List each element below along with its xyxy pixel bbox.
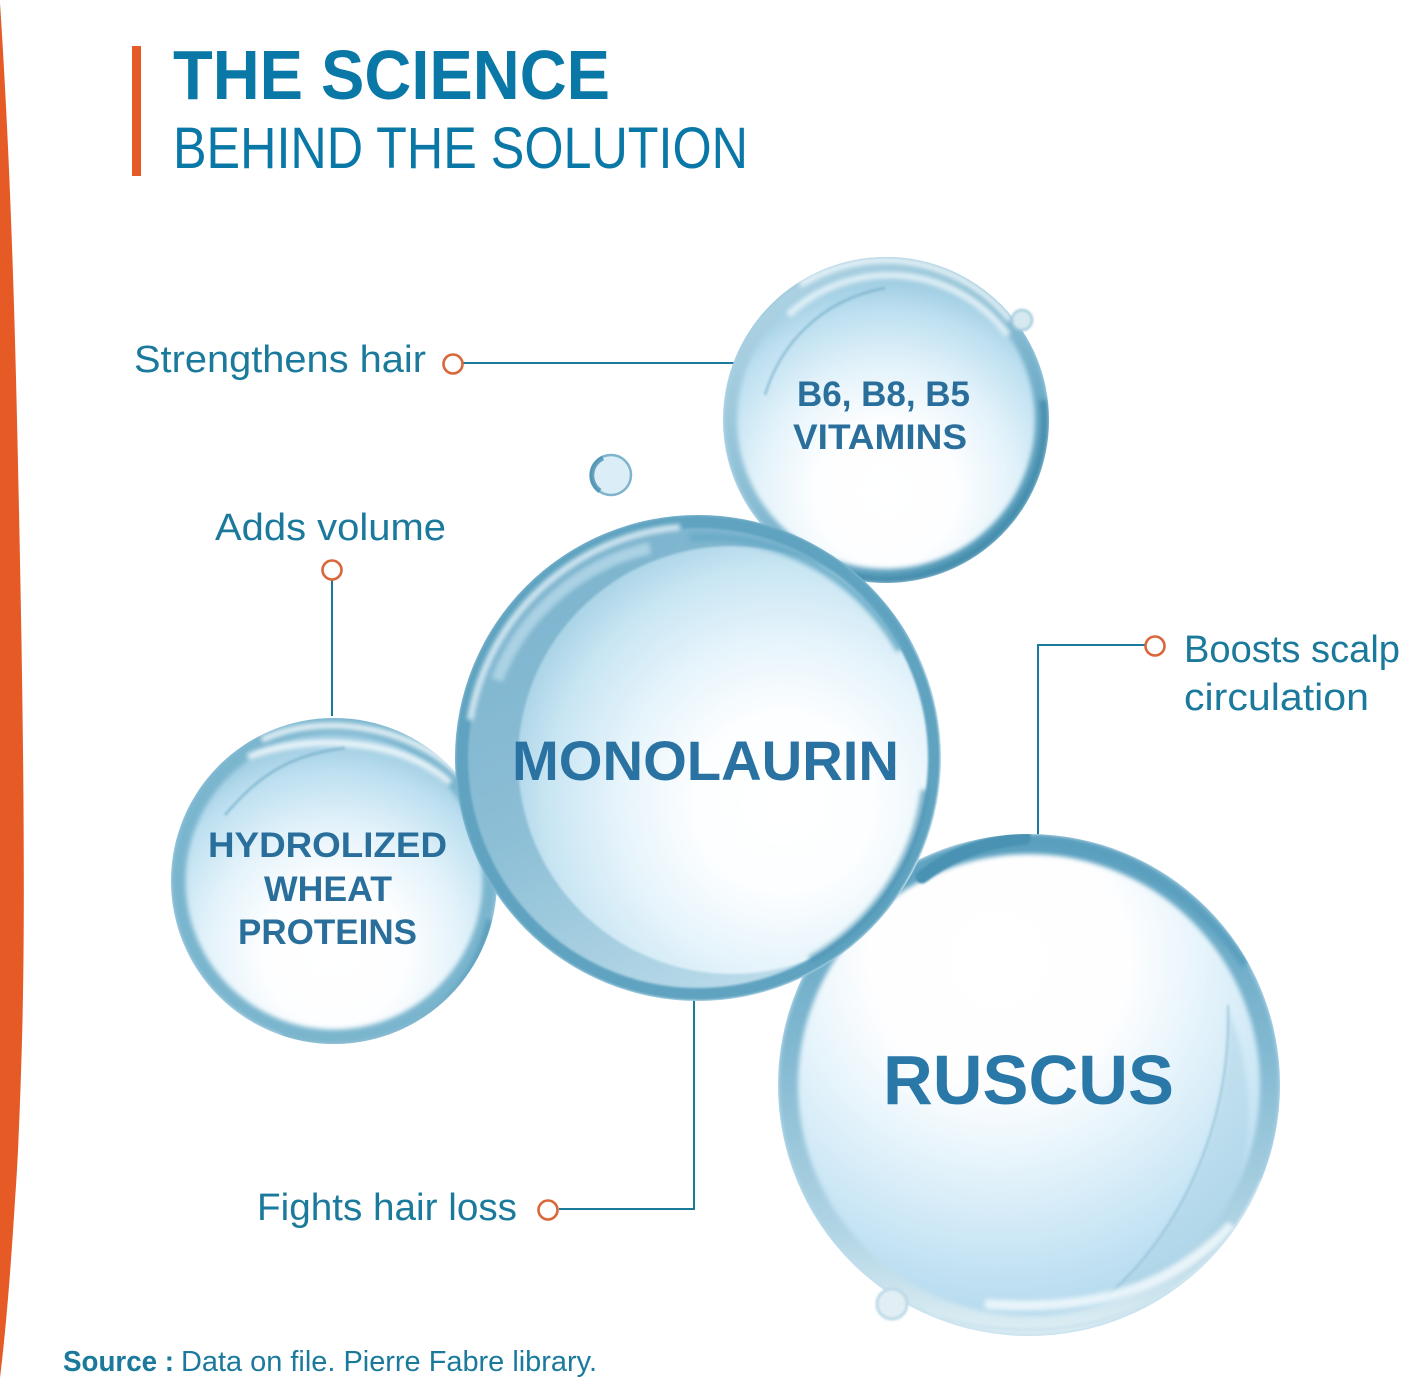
- bubble: wheat proteins: [171, 718, 497, 1048]
- label: vitamins: [793, 375, 970, 457]
- label: vitamins: VITAMINS: [793, 418, 967, 457]
- label: wheat proteins: PROTEINS: [238, 913, 417, 952]
- label: boosts scalp circulation: circulation: [1184, 677, 1369, 719]
- label: monolaurin: MONOLAURIN: [512, 729, 899, 792]
- label: wheat proteins: WHEAT: [264, 870, 392, 909]
- title: THE SCIENCE: [173, 36, 610, 114]
- connector: fights hair loss: [538, 1000, 694, 1220]
- label: boosts scalp circulation: Boosts scalp: [1184, 629, 1400, 671]
- connector: adds volume: [322, 560, 342, 716]
- label: fights hair loss: Fights hair loss: [257, 1187, 517, 1229]
- label: vitamins: B6, B8, B5: [797, 375, 970, 414]
- source note: Source :: [63, 1346, 174, 1378]
- bubble: vitamins: [723, 257, 1049, 583]
- label: boosts scalp circulation: [1184, 629, 1400, 719]
- title block: [132, 36, 748, 181]
- bubble: monolaurin: [455, 515, 946, 1001]
- source text: Data on file. Pierre Fabre library.: [181, 1346, 597, 1378]
- connector: boosts scalp circulation: [1038, 636, 1164, 836]
- label: adds volume: Adds volume: [215, 507, 446, 549]
- label: ruscus: RUSCUS: [883, 1041, 1174, 1119]
- subtitle: BEHIND THE SOLUTION: [173, 116, 748, 181]
- bubble: ruscus: [778, 834, 1280, 1336]
- label: wheat proteins: [208, 826, 447, 952]
- title accent bar: [132, 46, 141, 176]
- small droplet: [591, 455, 631, 495]
- label: strengthens hair: Strengthens hair: [134, 339, 426, 381]
- label: wheat proteins: HYDROLIZED: [208, 826, 447, 865]
- connector: strengthens hair: [444, 354, 736, 374]
- orange curved edge: [0, 3, 24, 1378]
